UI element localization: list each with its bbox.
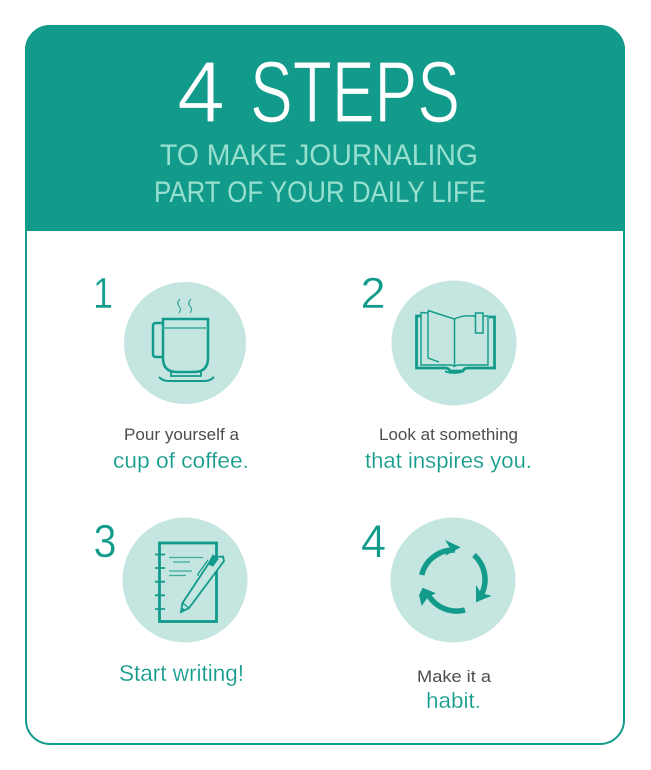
step 2 bbox=[360, 269, 532, 473]
caption 1: Pour yourself a bbox=[124, 425, 240, 444]
caption 1: cup of coffee. bbox=[113, 448, 249, 473]
circle 3 bbox=[122, 518, 248, 642]
circle 2 bbox=[392, 280, 516, 406]
caption 4: Make it a bbox=[417, 667, 492, 686]
caption 4 bbox=[417, 667, 492, 713]
caption 1 bbox=[113, 425, 249, 473]
icon: coffee cup bbox=[153, 299, 214, 381]
number 3: 3 bbox=[94, 515, 116, 567]
icon: cycle arrows bbox=[419, 540, 492, 611]
caption 2: Look at something bbox=[379, 425, 518, 444]
icon: open book bbox=[416, 310, 494, 373]
icon: notebook and pen bbox=[155, 543, 224, 622]
caption 2 bbox=[365, 425, 532, 473]
title bbox=[177, 44, 460, 141]
title: STEPS bbox=[250, 44, 460, 141]
circle 4 bbox=[390, 518, 516, 642]
subtitle bbox=[154, 139, 486, 209]
caption 2: that inspires you. bbox=[365, 448, 532, 473]
step 1 bbox=[93, 269, 249, 473]
subtitle: TO MAKE JOURNALING bbox=[160, 139, 478, 172]
step 4 bbox=[361, 515, 516, 713]
caption 4: habit. bbox=[426, 688, 481, 713]
subtitle: PART OF YOUR DAILY LIFE bbox=[154, 176, 486, 209]
title: 4 bbox=[177, 44, 225, 141]
caption 3: Start writing! bbox=[119, 660, 244, 686]
number 4: 4 bbox=[361, 515, 386, 567]
number 2: 2 bbox=[360, 269, 386, 318]
circle 1 bbox=[124, 282, 246, 404]
step 3 bbox=[94, 515, 248, 686]
number 1: 1 bbox=[93, 269, 113, 318]
header band bbox=[25, 25, 625, 231]
